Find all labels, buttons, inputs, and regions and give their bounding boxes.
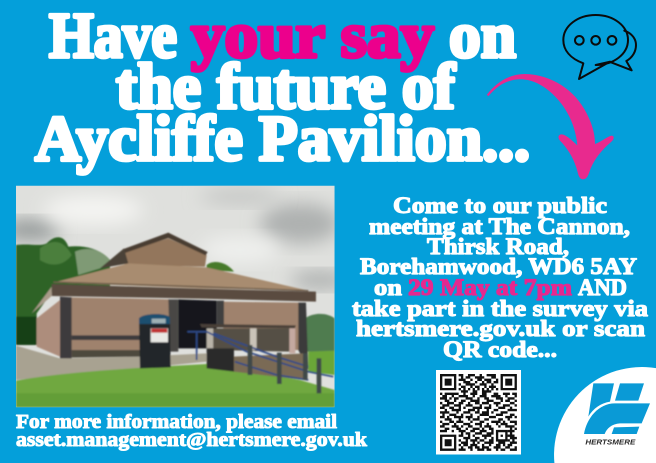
photo building — [32, 233, 316, 380]
contact text: For more information, please email — [16, 411, 337, 433]
title: Aycliffe Pavilion... — [35, 103, 530, 175]
event details text: on — [374, 275, 402, 300]
photo grass and path — [16, 346, 335, 407]
logo wordmark: HERTSMERE — [585, 439, 636, 446]
title: the future of — [116, 51, 456, 123]
logo mark — [584, 383, 650, 434]
event details text: hertsmere.gov.uk or scan — [356, 316, 645, 341]
photo litter bin — [139, 314, 171, 368]
event details text: meeting at The Cannon, — [369, 214, 630, 239]
title — [35, 0, 530, 175]
event details text: AND — [578, 275, 627, 300]
title: Have — [49, 0, 177, 72]
event details text — [352, 193, 649, 362]
event details text: QR code... — [443, 337, 557, 362]
contact text: asset.management@hertsmere.gov.uk — [16, 429, 368, 451]
contact text — [16, 411, 368, 451]
title: on — [449, 0, 516, 72]
QR code — [436, 370, 521, 454]
Hertsmere logo — [554, 367, 656, 463]
event details text: 29 May at 7pm — [408, 275, 572, 300]
arrow — [487, 74, 614, 179]
logo white circle — [554, 367, 656, 463]
event details text: take part in the survey via — [352, 296, 649, 321]
photo: Aycliffe Pavilion building — [0, 186, 350, 407]
photo trees — [16, 237, 335, 352]
photo sky — [0, 186, 350, 407]
event details text: Come to our public — [393, 193, 607, 218]
event details text: Borehamwood, WD6 5AY — [360, 254, 637, 279]
photo railings — [187, 332, 333, 393]
icon: speech bubbles — [563, 15, 636, 79]
title: your say — [191, 0, 434, 72]
event details text: Thirsk Road, — [427, 234, 569, 259]
